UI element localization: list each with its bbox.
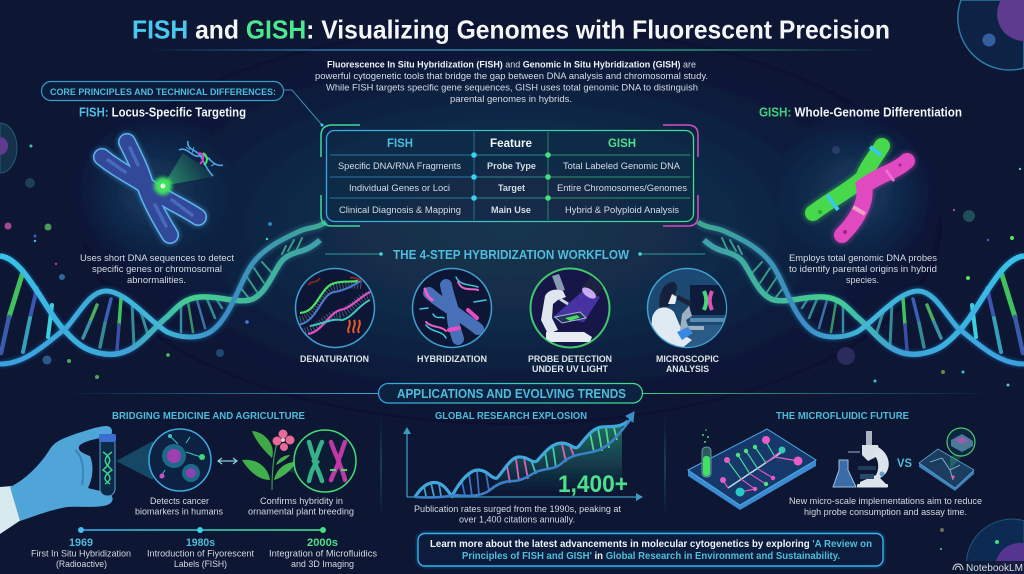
- NotebookLM badge: [949, 561, 1024, 574]
- intro paragraph: While FISH targets specific gene sequences, GISH uses total genomic DNA to distinguish: [326, 82, 698, 94]
- captions: Detects cancer: [150, 496, 209, 507]
- panel: microfluidic future: [688, 410, 982, 518]
- comparison table: Main Use: [491, 205, 531, 216]
- panel: global research explosion: [403, 410, 643, 526]
- icon: blue chromosome with probe: [102, 141, 223, 235]
- workflow section: [296, 248, 726, 374]
- label: VS: VS: [897, 456, 912, 470]
- panel: GISH: [759, 106, 962, 286]
- NotebookLM badge: NotebookLM: [966, 563, 1023, 574]
- timeline: Integration of Microfluidics: [269, 548, 377, 560]
- comparison table: [321, 125, 698, 226]
- step labels: [300, 354, 719, 374]
- timeline: 2000s: [307, 537, 338, 549]
- intro paragraph: Fluorescence In Situ Hybridization (FISH) and Genomic In Situ Hybridization (GISH) are: [327, 60, 696, 70]
- DNA helix right: [698, 222, 1024, 364]
- comparison table: Entire Chromosomes/Genomes: [557, 183, 687, 194]
- section heading: applications: [50, 384, 1003, 520]
- timeline: (Radioactive): [56, 559, 107, 570]
- timeline: [31, 527, 377, 570]
- step labels: PROBE DETECTION: [528, 354, 612, 364]
- timeline: 1969: [69, 537, 93, 549]
- callout: learn more: Learn more about the latest advancements in molecular cytogenetics by exploring 'A Review on: [430, 539, 872, 550]
- caption: GISH: Employs total genomic DNA probes: [789, 253, 937, 264]
- comparison table: Feature: [490, 136, 532, 150]
- caption: FISH: specific genes or chromosomal: [92, 264, 222, 275]
- caption: [414, 504, 621, 526]
- step labels: MICROSCOPIC: [656, 354, 719, 364]
- icon: gloved hand holding tube: [0, 426, 116, 534]
- comparison table: GISH: [608, 136, 636, 150]
- section heading: applications: APPLICATIONS AND EVOLVING TRENDS: [397, 386, 626, 401]
- timeline: First In Situ Hybridization: [31, 548, 131, 560]
- callout: core principles: [42, 82, 324, 126]
- caption: FISH: Uses short DNA sequences to detect: [80, 253, 234, 264]
- comparison table: Probe Type: [487, 161, 536, 172]
- comparison table: Total Labeled Genomic DNA: [563, 161, 681, 172]
- heading: workflow: THE 4-STEP HYBRIDIZATION WORKFLOW: [393, 248, 629, 262]
- captions: [135, 496, 354, 518]
- panel: FISH: [79, 106, 246, 286]
- step labels: UNDER UV LIGHT: [532, 364, 608, 374]
- comparison table: Specific DNA/RNA Fragments: [338, 161, 461, 172]
- comparison table: Individual Genes or Loci: [349, 183, 450, 194]
- timeline: and 3D Imaging: [291, 559, 354, 570]
- caption: [789, 496, 982, 518]
- heading: workflow: [325, 248, 705, 262]
- chart: DNA growth curve: [403, 412, 643, 501]
- comparison table: Hybrid & Polyploid Analysis: [565, 205, 679, 216]
- step labels: DENATURATION: [300, 354, 369, 364]
- timeline: 1980s: [186, 537, 215, 549]
- heading: THE MICROFLUIDIC FUTURE: [776, 410, 909, 422]
- icon: plant and chromosomes: [242, 430, 356, 492]
- callout: learn more: Principles of FISH and GISH' in Global Research in Environment and Sustainability.: [462, 551, 840, 562]
- heading: GLOBAL RESEARCH EXPLOSION: [435, 410, 587, 422]
- step labels: ANALYSIS: [666, 364, 709, 374]
- icon: miniature chip: [919, 428, 975, 491]
- chart: DNA growth curve: 1,400+: [558, 471, 628, 498]
- DNA helix left: [0, 222, 326, 364]
- caption: GISH: to identify parental origins in hybrid: [789, 264, 937, 275]
- title: FISH and GISH: Visualizing Genomes with Fluorescent Precision: [132, 14, 890, 44]
- caption: FISH: [80, 253, 234, 286]
- step labels: HYBRIDIZATION: [417, 354, 487, 364]
- timeline: Introduction of Fiyorescent: [147, 548, 254, 560]
- arrow: double headed: [218, 458, 237, 464]
- callout: learn more: [418, 534, 883, 566]
- icon: flask and microscope: [833, 431, 889, 488]
- comparison table: Clinical Diagnosis & Mapping: [339, 205, 461, 216]
- heading: BRIDGING MEDICINE AND AGRICULTURE: [112, 410, 305, 422]
- caption: over 1,400 citations annually.: [459, 514, 575, 526]
- step: denaturation: [296, 268, 374, 348]
- icon: microfluidic chip: [688, 429, 816, 510]
- caption: high probe consumption and assay time.: [804, 507, 967, 518]
- captions: ornamental plant breeding: [248, 506, 354, 518]
- timeline: Labels (FISH): [174, 559, 227, 570]
- icon: green and magenta chromosome: [813, 146, 907, 235]
- caption: Publication rates surged from the 1990s, peaking at: [414, 504, 621, 515]
- intro paragraph: powerful cytogenetic tools that bridge the gap between DNA analysis and chromosomal study.: [315, 71, 708, 82]
- caption: FISH: abnormalities.: [127, 275, 186, 286]
- intro paragraph: [315, 60, 708, 105]
- intro paragraph: parental genomes in hybrids.: [450, 94, 572, 105]
- caption: GISH: [789, 253, 937, 286]
- icon: cancer cell magnifier: [116, 429, 211, 491]
- callout: core principles: CORE PRINCIPLES AND TECHNICAL DIFFERENCES:: [50, 87, 276, 98]
- step: probe detection: [530, 268, 610, 348]
- step: microscopic analysis: [648, 268, 726, 350]
- caption: New micro-scale implementations aim to reduce: [789, 496, 982, 507]
- comparison table: FISH: [387, 136, 413, 150]
- comparison table: Target: [498, 183, 526, 194]
- step: hybridization: [412, 268, 492, 348]
- captions: biomarkers in humans: [135, 506, 223, 518]
- caption: GISH: species.: [846, 275, 879, 286]
- captions: Confirms hybridity in: [260, 496, 343, 507]
- heading: GISH: GISH: Whole-Genome Differentiation: [759, 106, 962, 120]
- heading: FISH: FISH: Locus-Specific Targeting: [79, 106, 246, 120]
- panel: bridging medicine and agriculture: [0, 410, 377, 570]
